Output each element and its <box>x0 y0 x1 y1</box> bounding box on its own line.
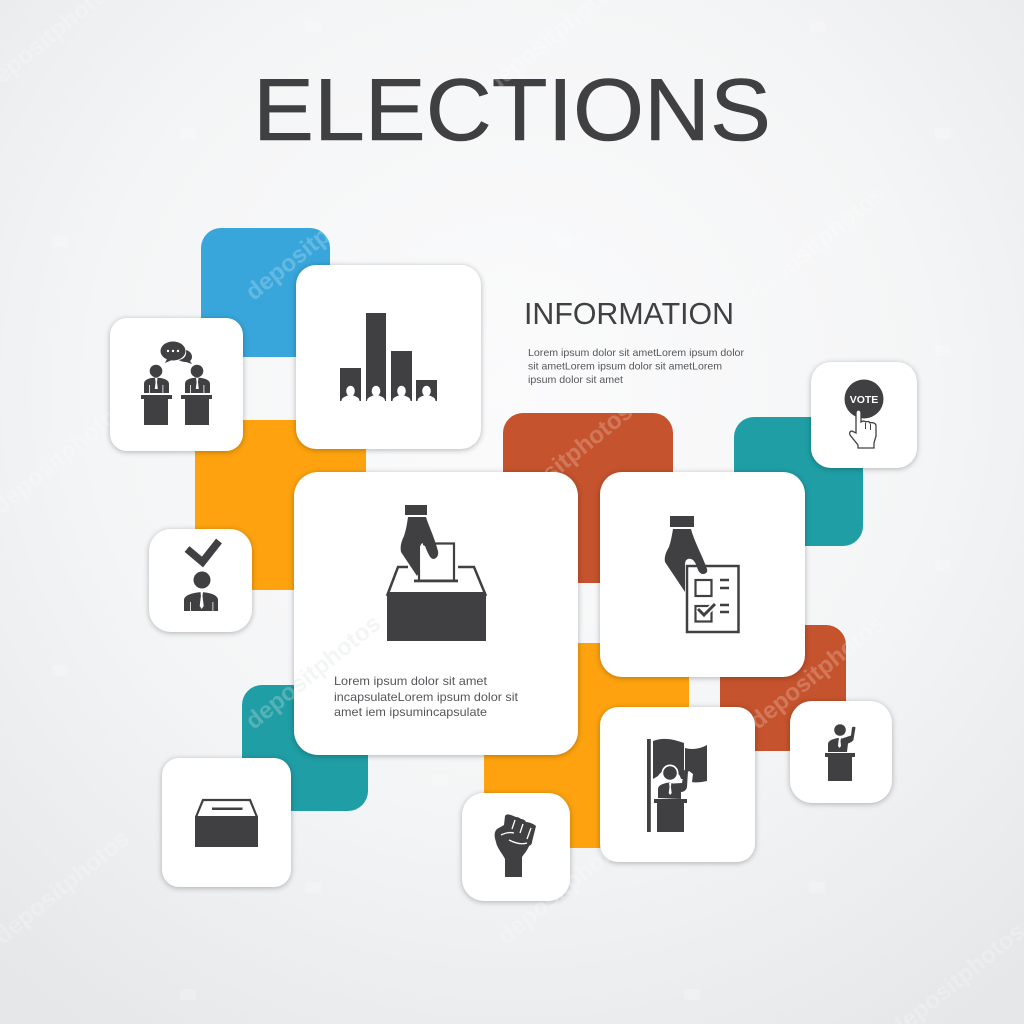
text block: main card body: incapsulateLorem ipsum dolor sit <box>334 690 519 704</box>
panel: ballot paper card <box>600 472 805 677</box>
icon: check mark over person <box>184 541 219 611</box>
colour block: red right <box>720 625 846 751</box>
colour block: orange left <box>195 420 366 590</box>
panel: debate card <box>110 318 243 451</box>
text block: information body: Lorem ipsum dolor sit ametLorem ipsum dolor <box>528 347 744 359</box>
text block: main card body <box>334 674 519 719</box>
title: ELECTIONS <box>253 60 771 159</box>
icon: speaker with flag <box>647 739 707 832</box>
colour block: teal right <box>734 417 863 546</box>
colour block: red centre <box>503 413 673 583</box>
panel: ballot box card <box>162 758 291 887</box>
colour block: orange centre <box>484 643 689 848</box>
icon: raised fist <box>495 814 536 877</box>
watermark: depositphotos <box>745 610 890 735</box>
icon: debate at two podiums <box>141 342 212 425</box>
watermark: depositphotos <box>493 398 638 523</box>
colour block: teal left <box>242 685 368 811</box>
panel: main ballot card <box>294 472 578 755</box>
watermark: depositphotos <box>241 181 386 306</box>
text block: information body: ipsum dolor sit amet <box>528 374 623 386</box>
text block: main card body: amet iem ipsumincapsulate <box>334 705 487 719</box>
panel: raised fist card <box>462 793 570 901</box>
text block: main card body: Lorem ipsum dolor sit amet <box>334 674 488 688</box>
heading: information: INFORMATION <box>524 296 734 331</box>
icon: bar chart with candidates <box>340 313 437 401</box>
panel: bar chart card <box>296 265 481 449</box>
text block: information body <box>528 347 744 386</box>
icon: vote button with cursor: VOTE <box>850 394 878 406</box>
text block: information body: sit ametLorem ipsum dolor sit ametLorem <box>528 360 722 372</box>
watermark: depositphotos <box>241 610 386 735</box>
watermark: depositphotos <box>493 825 638 950</box>
panel: approved candidate card <box>149 529 252 632</box>
icon: hand casting ballot <box>387 505 486 641</box>
icon: hand holding ballot paper <box>665 516 738 632</box>
icon: ballot box <box>195 800 258 847</box>
panel: flag speaker card <box>600 707 755 862</box>
panel: vote button card <box>811 362 917 468</box>
panel: speaker card <box>790 701 892 803</box>
icon: speaker at podium <box>825 724 856 781</box>
watermark: depositphotos <box>745 181 890 306</box>
colour block: blue <box>201 228 330 357</box>
